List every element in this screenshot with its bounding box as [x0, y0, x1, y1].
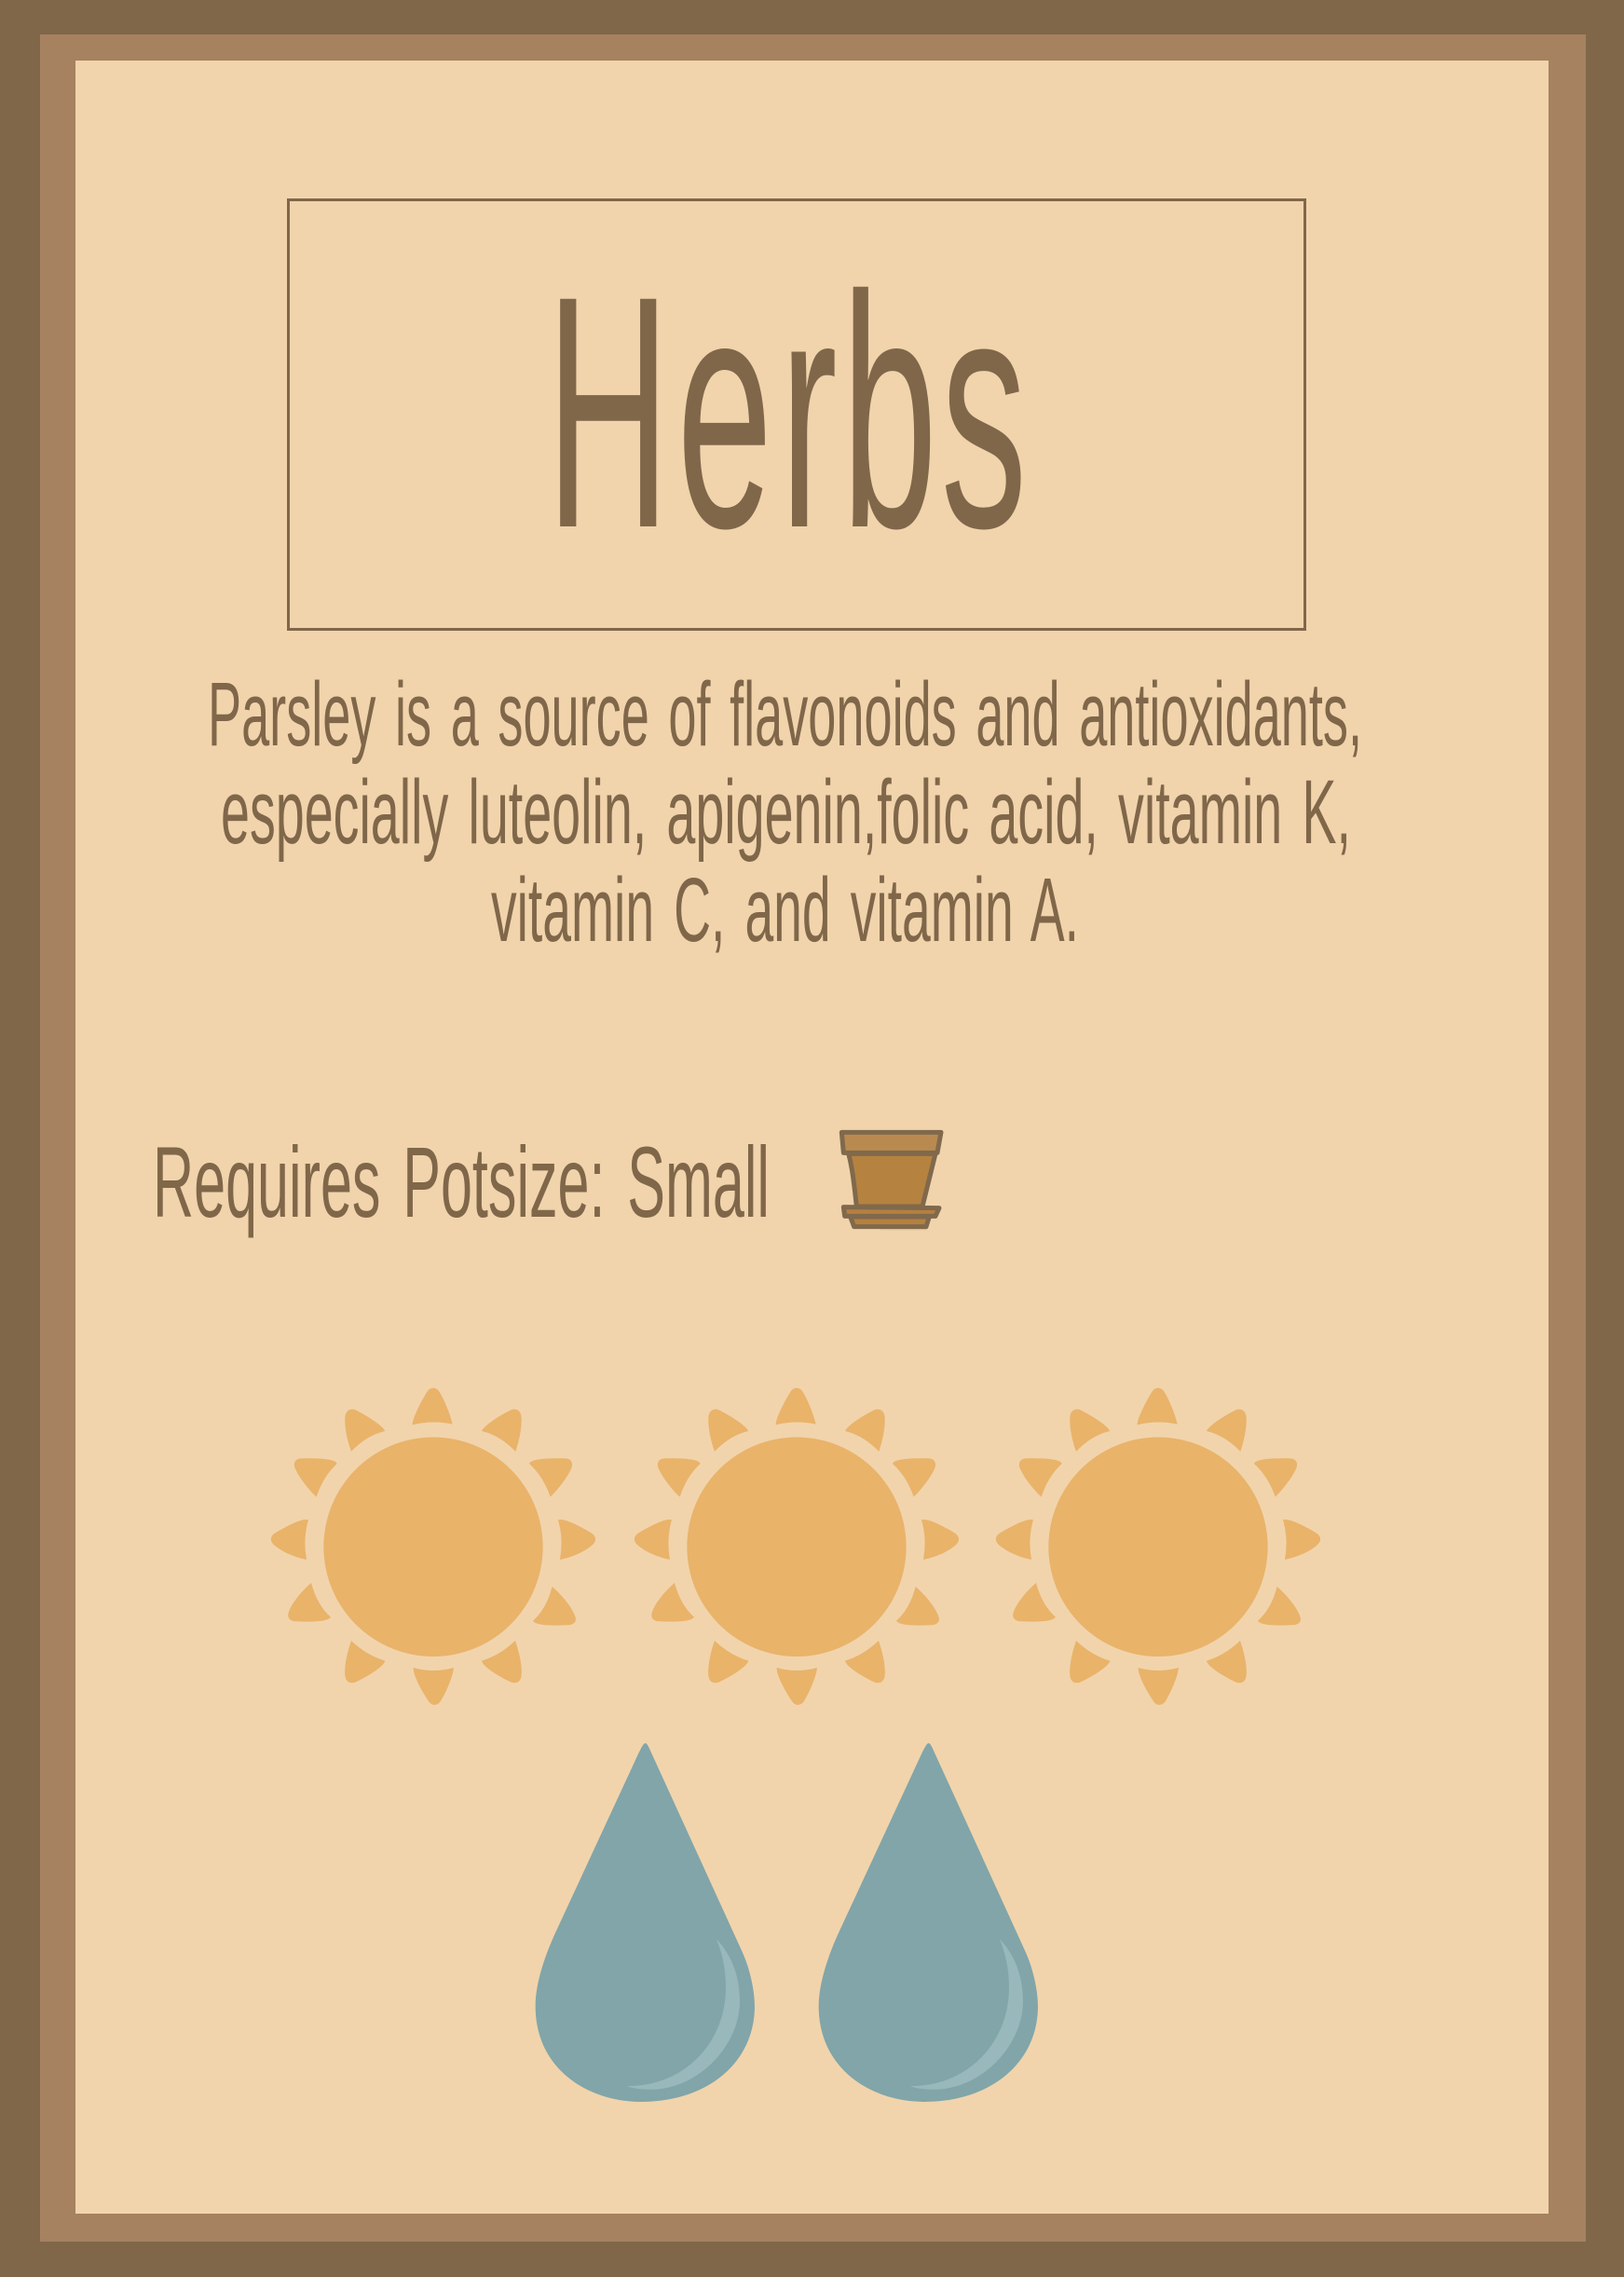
title: Herbs — [546, 227, 1027, 596]
pot size label: Requires Potsize: Small — [153, 1125, 770, 1238]
icon: sun 2 — [635, 1388, 959, 1705]
icon: water drop 1 — [536, 1743, 755, 2102]
icon: water drop 2 — [819, 1743, 1038, 2102]
icon: small flower pot — [841, 1132, 941, 1230]
title box — [289, 199, 1304, 630]
description text: vitamin C, and vitamin A. — [491, 859, 1079, 961]
icon: sun 3 — [996, 1388, 1320, 1705]
icon: sun 1 — [271, 1388, 595, 1705]
description text — [208, 663, 1362, 961]
